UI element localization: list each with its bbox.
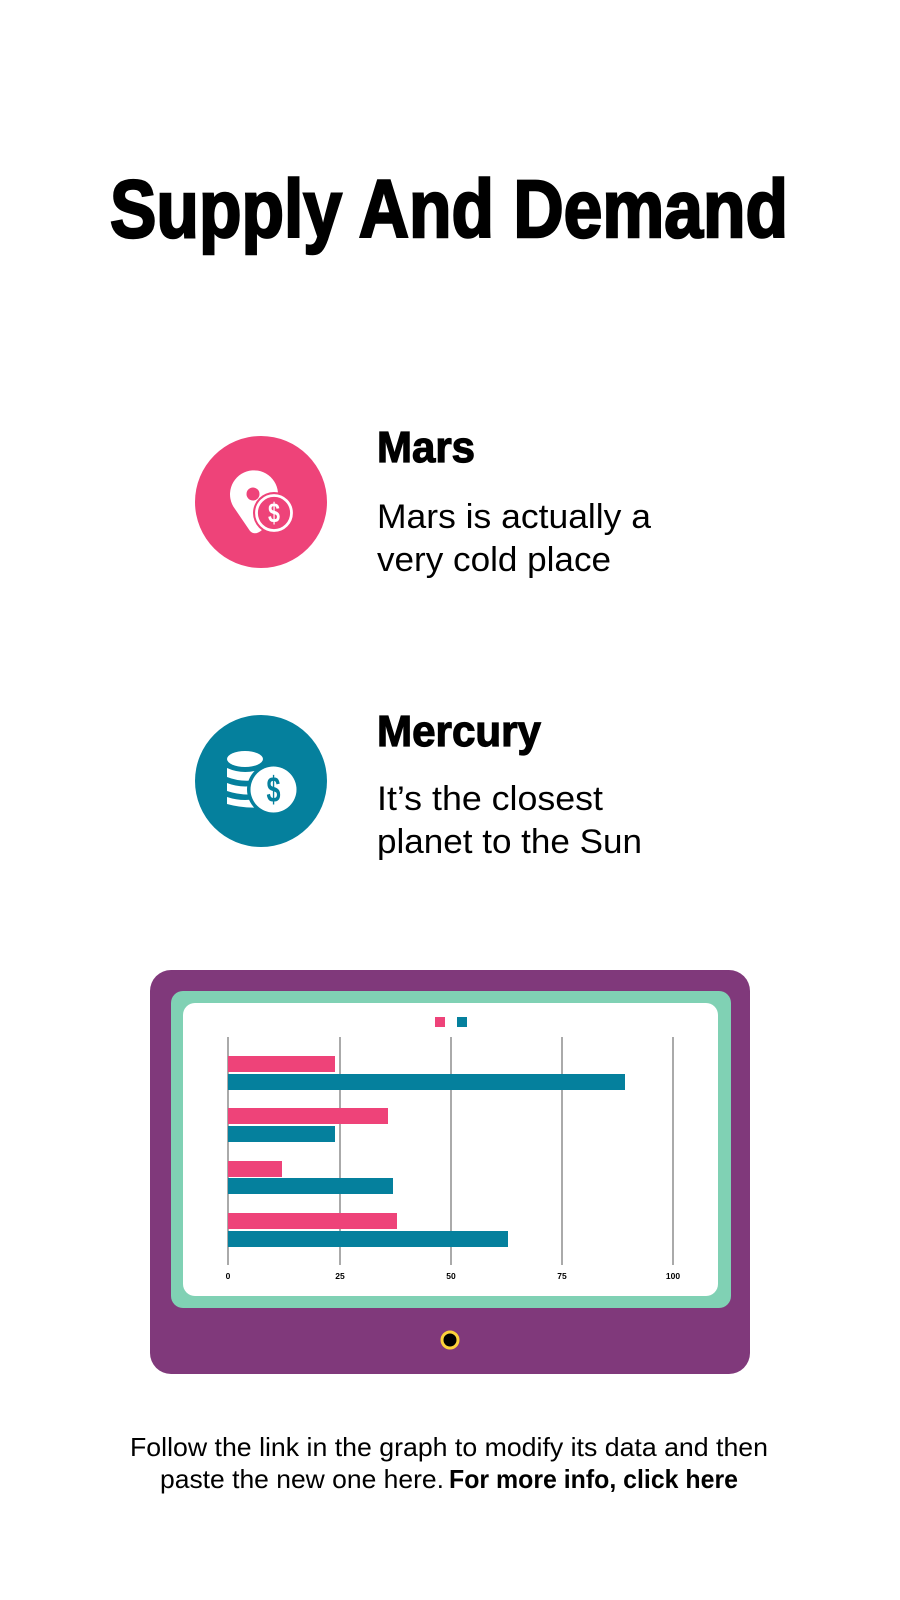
icon: coin stack with dollar coin <box>195 715 327 847</box>
bar chart <box>226 1017 680 1281</box>
caption: paste the new one here. <box>160 1464 444 1494</box>
caption: For more info, click here <box>449 1464 738 1494</box>
icon: location pin with dollar coin: $ <box>268 498 280 528</box>
text: Mercury description: It’s the closest <box>377 780 604 818</box>
axis labels: 25 <box>335 1271 345 1281</box>
axis labels: 75 <box>557 1271 567 1281</box>
icon: location pin with dollar coin <box>195 436 327 568</box>
caption <box>130 1432 768 1494</box>
heading: Mars: Mars <box>377 423 475 472</box>
text: Mercury description: planet to the Sun <box>377 823 642 861</box>
icon: tablet camera <box>442 1332 458 1348</box>
axis labels: 50 <box>446 1271 456 1281</box>
text: Mars description: Mars is actually a <box>377 498 651 536</box>
icon: coin stack with dollar coin: $ <box>266 769 280 810</box>
axis labels <box>226 1271 680 1281</box>
axis labels: 100 <box>666 1271 680 1281</box>
text: Mars description: very cold place <box>377 541 611 579</box>
title: Supply And Demand <box>110 164 788 255</box>
panel: tablet frame with chart <box>150 970 750 1374</box>
legend <box>435 1017 467 1027</box>
panel: Mercury <box>195 707 642 861</box>
bars: series pink <box>228 1056 397 1229</box>
heading: Mercury: Mercury <box>377 707 542 756</box>
panel: Mars <box>195 423 651 579</box>
caption: Follow the link in the graph to modify its data and then <box>130 1432 768 1462</box>
text: Mercury description <box>377 780 642 861</box>
axis labels: 0 <box>226 1271 231 1281</box>
bars: series teal <box>228 1074 625 1247</box>
text: Mars description <box>377 498 651 579</box>
